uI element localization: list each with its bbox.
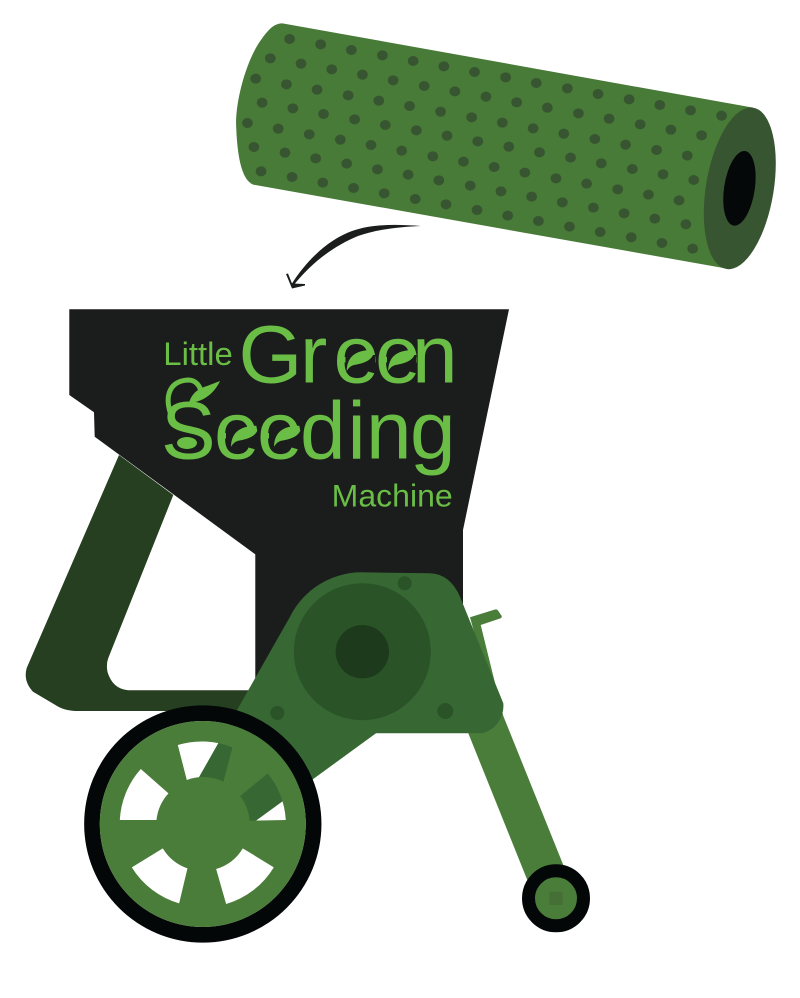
seed dots: [242, 34, 727, 254]
logo: Little Green Seeding Machine: [161, 310, 458, 514]
small tyre: [528, 871, 584, 926]
logo word: Machine: Machine: [332, 478, 453, 514]
seed mat roll: [236, 23, 786, 274]
roll end face: [693, 103, 786, 274]
tyre: [84, 705, 321, 943]
bolt: [398, 576, 412, 590]
bolt: [437, 703, 453, 719]
logo word: Little: Little: [163, 336, 233, 372]
logo word: Green: Green: [238, 310, 458, 400]
hopper body: [69, 309, 509, 700]
wheel rim with spoke windows: [100, 721, 306, 927]
bracket plate: [190, 572, 503, 825]
bolt: [270, 706, 284, 720]
roll body: [236, 23, 753, 269]
drive bracket: [190, 572, 503, 825]
logo sprout on S: [168, 380, 220, 412]
rear leg: [468, 609, 563, 880]
drive hub: [336, 625, 389, 678]
handle frame: [26, 455, 250, 711]
logo leaves replacing the e crossbars: [226, 350, 416, 447]
logo seed in S: [177, 437, 197, 449]
arrow: roll into hopper: [286, 225, 421, 288]
logo word: Seeding: Seeding: [161, 385, 456, 476]
large wheel: [84, 705, 321, 943]
small front wheel: [528, 871, 584, 926]
roll core hole: [719, 149, 760, 228]
axle: [549, 892, 563, 905]
drive disc: [294, 583, 431, 720]
